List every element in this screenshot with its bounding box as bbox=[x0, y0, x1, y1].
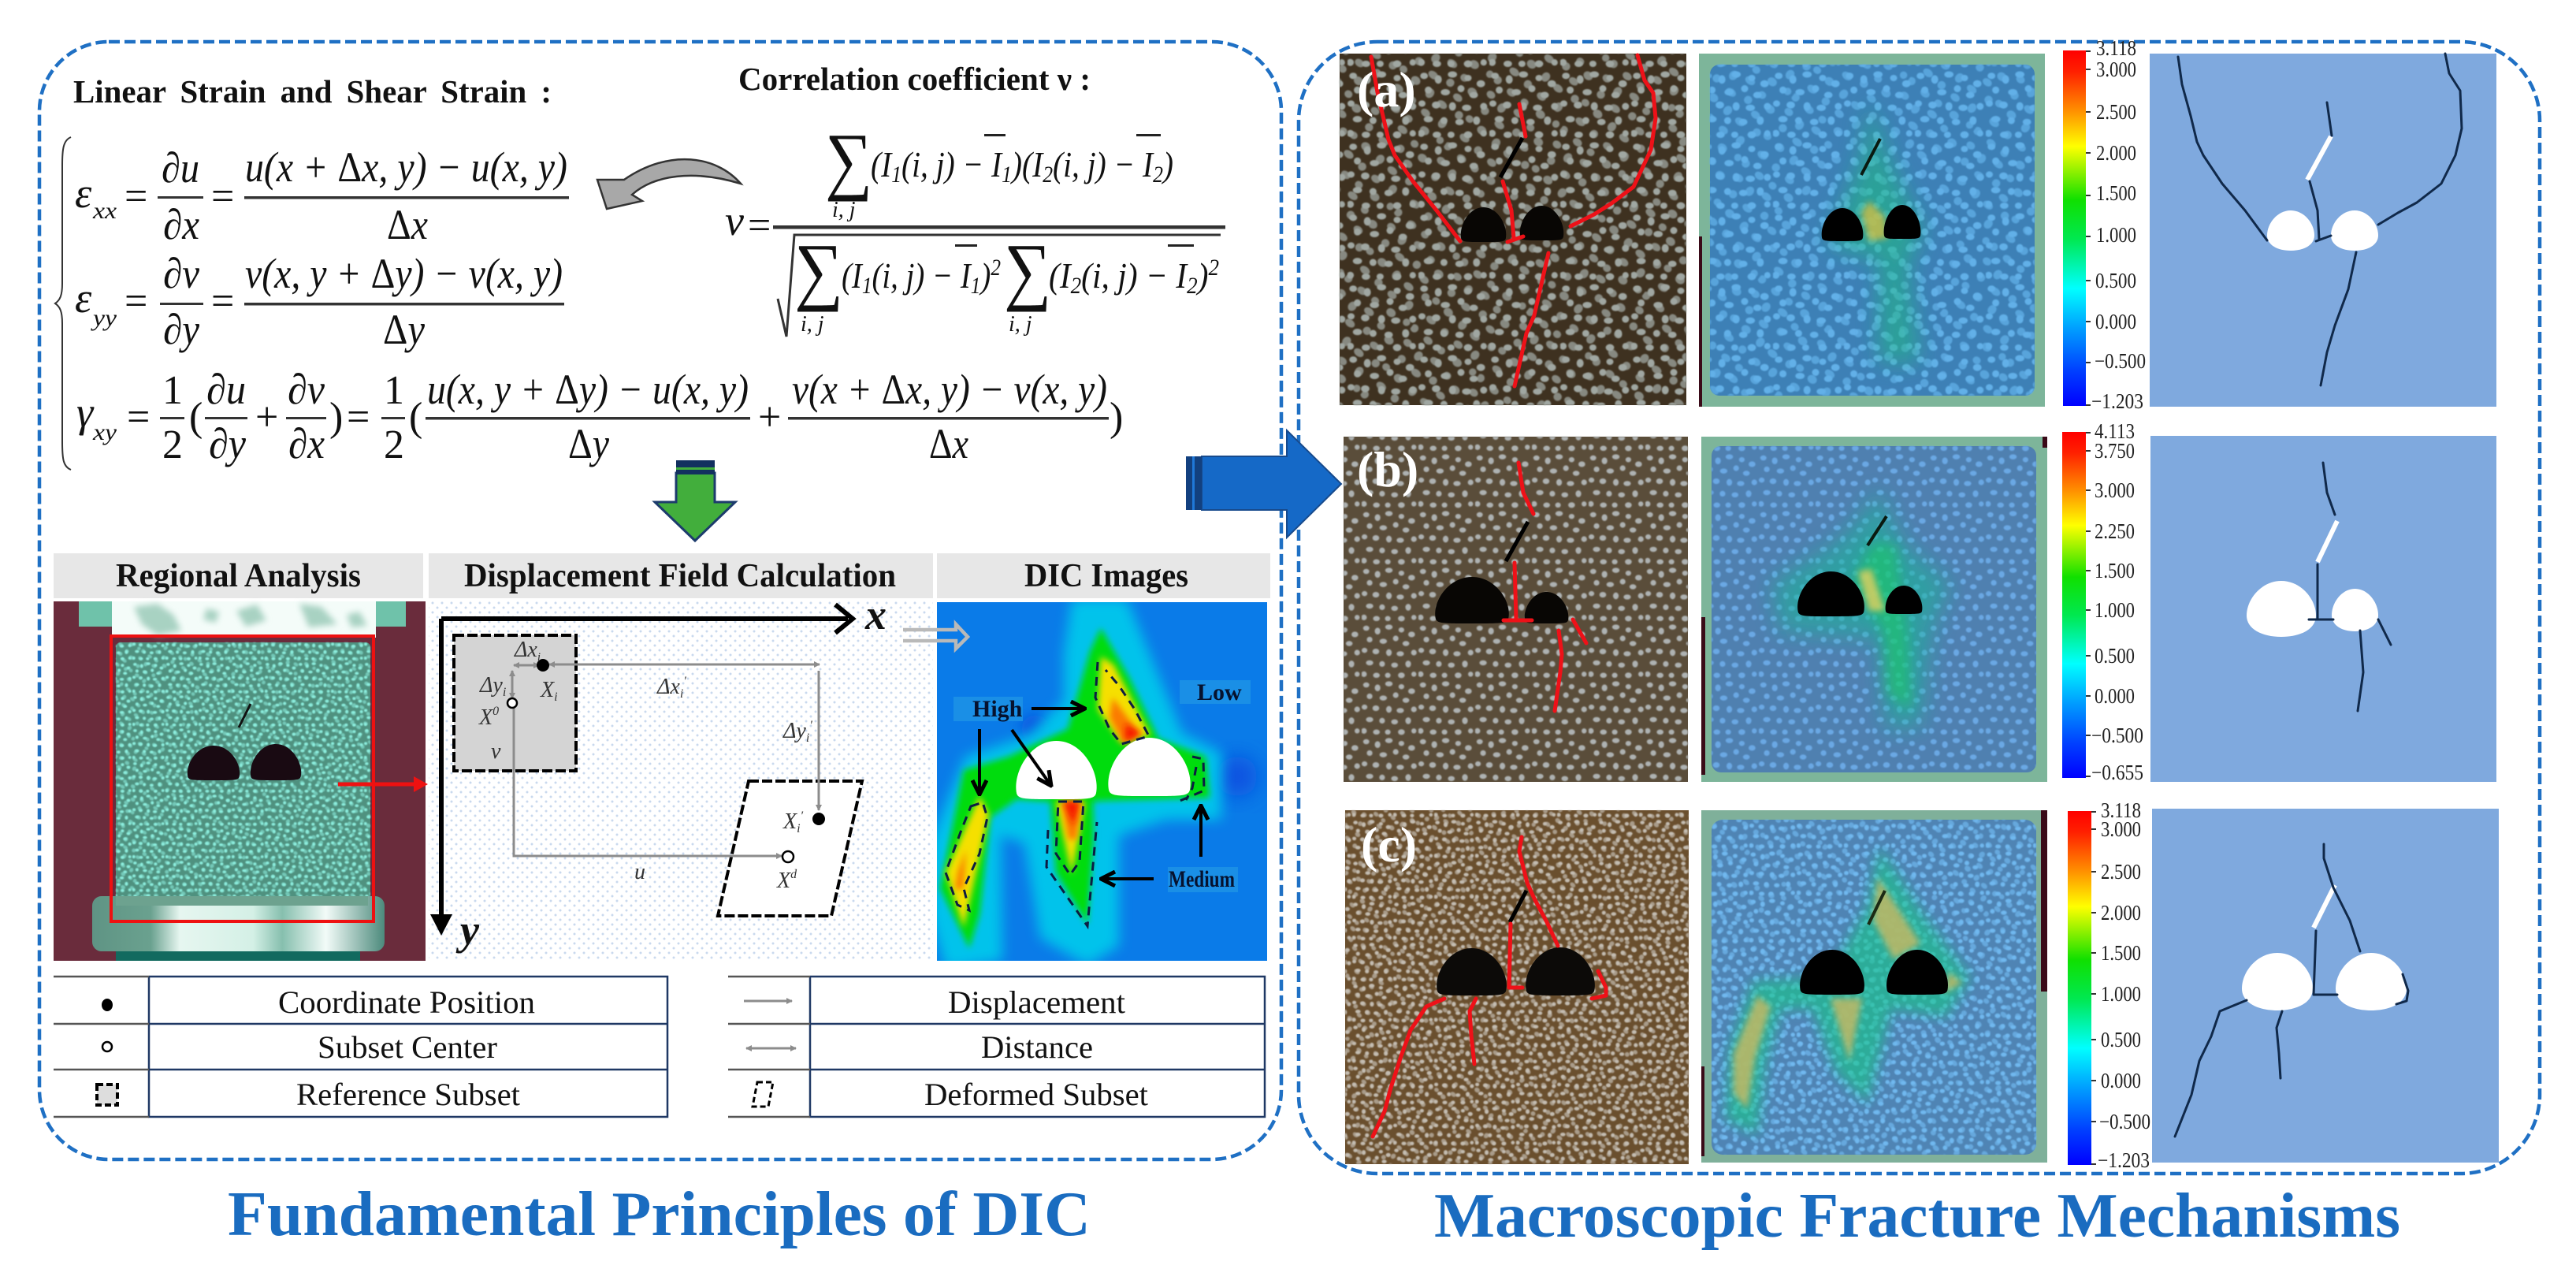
row b: colour bar bbox=[2062, 419, 2143, 784]
equations: strain formulas: Δx bbox=[929, 420, 968, 467]
row a: crack schematic bbox=[2150, 54, 2496, 407]
label: (b): (b) bbox=[1357, 441, 1418, 497]
equation: correlation coefficient: )(I bbox=[1009, 144, 1044, 184]
diagram: displacement field: ′ bbox=[683, 675, 686, 688]
diagram: displacement field: Δy bbox=[783, 719, 806, 743]
equation: correlation coefficient: 1 bbox=[1002, 162, 1012, 188]
diagram: displacement field: X bbox=[783, 809, 797, 834]
equations: strain formulas: = bbox=[125, 174, 147, 219]
row c: colour bar: 0.000 bbox=[2101, 1069, 2141, 1092]
equations: strain formulas: Δy bbox=[568, 420, 609, 467]
image: DIC strain field with high, medium and low labels bbox=[930, 599, 1267, 969]
row b: DIC overlay bbox=[1701, 437, 2047, 782]
legend table: symbols left: Subset Center bbox=[318, 1029, 497, 1065]
equations: strain formulas: ( bbox=[409, 395, 422, 440]
diagram: displacement field: i bbox=[554, 690, 558, 704]
label: Low bbox=[1180, 679, 1251, 705]
diagram: displacement field: X bbox=[541, 678, 554, 702]
row a: colour bar: −0.500 bbox=[2095, 349, 2146, 373]
equations: strain formulas: xx bbox=[92, 198, 117, 224]
equation: correlation coefficient: 2 bbox=[1153, 162, 1163, 188]
equation: correlation coefficient: (i, j) − I bbox=[1081, 255, 1189, 296]
row b: crack schematic bbox=[2150, 436, 2496, 782]
diagram: displacement field: Δx bbox=[515, 638, 537, 662]
panel: fundamental principles of DIC bbox=[39, 42, 1281, 1159]
label: (a): (a) bbox=[1357, 61, 1416, 117]
row c: colour bar: 0.500 bbox=[2101, 1028, 2141, 1051]
row c: colour bar: −0.500 bbox=[2099, 1110, 2150, 1133]
equation: correlation coefficient: i, j bbox=[832, 198, 856, 222]
diagram: displacement field bbox=[429, 591, 933, 961]
icon: open circle bbox=[102, 1042, 112, 1051]
equations: strain formulas: = bbox=[347, 395, 370, 440]
diagram: displacement field: i bbox=[503, 686, 506, 699]
legend table: symbols left: Coordinate Position bbox=[278, 984, 535, 1020]
row c: colour bar: −1.203 bbox=[2098, 1148, 2150, 1172]
icon: distance arrow bbox=[746, 1047, 796, 1050]
equations: strain formulas: ∂u bbox=[162, 144, 199, 192]
title: fundamental principles of DIC: Fundamental Principles of DIC bbox=[228, 1180, 1091, 1249]
row b: colour bar: 4.113 bbox=[2095, 419, 2135, 443]
equations: strain formulas: + bbox=[758, 395, 781, 440]
equation: correlation coefficient: 2 bbox=[1208, 255, 1219, 281]
row a: colour bar bbox=[2063, 36, 2146, 413]
legend table: symbols right: Deformed Subset bbox=[924, 1077, 1148, 1112]
row c: colour bar bbox=[2068, 798, 2150, 1172]
row c: colour bar: 2.000 bbox=[2101, 901, 2141, 925]
equations: strain formulas: ∂x bbox=[288, 420, 325, 467]
diagram: displacement field: Δy bbox=[480, 673, 503, 698]
equations: strain formulas: Δx bbox=[387, 201, 428, 248]
diagram: displacement field: d bbox=[790, 868, 797, 881]
equations: strain formulas: ( bbox=[189, 395, 203, 440]
diagram: displacement field: X bbox=[479, 705, 493, 730]
diagram: displacement field: v bbox=[491, 739, 501, 764]
equations: strain formulas: ∂y bbox=[209, 420, 246, 467]
arrow: large blue arrow between panels bbox=[1186, 430, 1341, 538]
diagram: displacement field: ′ bbox=[809, 719, 812, 732]
equation: correlation coefficient: (i, j) − I bbox=[872, 255, 972, 296]
row a: photo with cracks bbox=[1340, 54, 1686, 405]
diagram: displacement field: 0 bbox=[493, 705, 499, 718]
icon: displacement arrow bbox=[744, 999, 792, 1003]
row c: colour bar: 3.118 bbox=[2101, 798, 2141, 822]
equation: correlation coefficient: 2 bbox=[1043, 162, 1053, 188]
legend table: symbols right: Displacement bbox=[948, 984, 1125, 1020]
equations: strain formulas: xy bbox=[92, 419, 117, 445]
equation: correlation coefficient: ∑ bbox=[1004, 228, 1051, 312]
row b: colour bar: 0.500 bbox=[2095, 644, 2135, 668]
row a: colour bar: 3.118 bbox=[2096, 36, 2136, 60]
equations: strain formulas: 1 bbox=[162, 368, 183, 413]
legend table: symbols left: Reference Subset bbox=[296, 1077, 520, 1112]
arrow: red arrow from specimen to field bbox=[338, 776, 428, 792]
equations: strain formulas: ) bbox=[1110, 395, 1123, 440]
equation: correlation coefficient: 2 bbox=[1187, 273, 1198, 299]
section header: displacement field calculation: Displacement Field Calculation bbox=[464, 558, 896, 594]
row c: colour bar: 1.500 bbox=[2101, 941, 2141, 965]
label: High: High bbox=[972, 696, 1023, 722]
equation: correlation coefficient: ∑ bbox=[825, 117, 872, 202]
diagram: displacement field: i bbox=[806, 731, 809, 745]
diagram: displacement field: i bbox=[797, 822, 801, 835]
equation: correlation coefficient: i, j bbox=[801, 312, 824, 337]
equation: correlation coefficient: (I bbox=[871, 144, 895, 184]
row a: colour bar: 0.000 bbox=[2095, 310, 2136, 333]
diagram: displacement field: ′ bbox=[801, 809, 804, 823]
diagram: displacement field: Δx bbox=[657, 675, 680, 699]
equations: strain formulas: yy bbox=[91, 305, 117, 331]
row b: colour bar: 1.000 bbox=[2095, 598, 2135, 622]
equation: correlation coefficient: ∑ bbox=[794, 228, 843, 312]
equations: strain formulas: + bbox=[255, 395, 278, 440]
heading: correlation coefficient: Correlation coefficient ν : bbox=[738, 61, 1091, 97]
section header: DIC images: DIC Images bbox=[1024, 558, 1188, 594]
legend table: symbols left bbox=[54, 977, 667, 1117]
row a: colour bar: 2.000 bbox=[2096, 141, 2136, 165]
equation: correlation coefficient: ) bbox=[979, 255, 991, 296]
diagram: displacement field: i bbox=[680, 687, 683, 701]
equations: strain formulas: v(x, y + Δy) − v(x, y) bbox=[245, 250, 563, 297]
row a: colour bar: −1.203 bbox=[2091, 389, 2143, 413]
row c: colour bar: 1.000 bbox=[2101, 982, 2141, 1006]
icon: filled dot bbox=[102, 999, 113, 1011]
heading: linear strain and shear strain: Linear Strain and Shear Strain : bbox=[73, 73, 552, 110]
row a: colour bar: 1.000 bbox=[2096, 223, 2136, 247]
section header: DIC images bbox=[937, 553, 1270, 598]
title: macroscopic fracture mechanisms: Macroscopic Fracture Mechanisms bbox=[1434, 1181, 2400, 1251]
label: Low: Low bbox=[1197, 679, 1242, 705]
equations: strain formulas: γ bbox=[76, 389, 95, 436]
row c: photo with cracks bbox=[1345, 810, 1689, 1164]
row b: photo with cracks bbox=[1344, 437, 1688, 782]
equations: strain formulas: ) bbox=[329, 395, 343, 440]
equations: strain formulas: ∂v bbox=[163, 250, 199, 297]
row b: colour bar: −0.655 bbox=[2091, 761, 2143, 784]
arrow: green down arrow bbox=[655, 460, 735, 541]
equations: strain formulas: = bbox=[125, 279, 147, 324]
row a: DIC overlay bbox=[1699, 54, 2045, 407]
row c: colour bar: 3.000 bbox=[2101, 817, 2141, 841]
equation: correlation coefficient: ) bbox=[1161, 144, 1173, 184]
row a: colour bar: 2.500 bbox=[2096, 100, 2136, 124]
image: specimen for regional analysis bbox=[54, 601, 426, 961]
equation: correlation coefficient: = bbox=[748, 203, 771, 248]
equations: strain formulas: ∂v bbox=[288, 366, 325, 413]
equation: correlation coefficient: (i, j) − I bbox=[901, 144, 1003, 184]
arrow: hollow grey arrow bbox=[903, 624, 968, 649]
equations: strain formulas: = bbox=[211, 279, 234, 324]
row b: colour bar: 0.000 bbox=[2095, 684, 2135, 708]
label: Medium: Medium bbox=[1169, 866, 1235, 892]
equation: correlation coefficient: i, j bbox=[1009, 312, 1032, 337]
equation: correlation coefficient: 2 bbox=[1071, 273, 1081, 299]
diagram: displacement field: X bbox=[777, 869, 790, 893]
row c: DIC overlay bbox=[1701, 810, 2047, 1163]
equations: strain formulas: ∂u bbox=[206, 366, 246, 413]
row b: colour bar: −0.500 bbox=[2091, 724, 2143, 747]
diagram: displacement field: y bbox=[455, 906, 480, 954]
legend table: symbols right: Distance bbox=[981, 1029, 1093, 1065]
equations: strain formulas: u(x, y + Δy) − u(x, y) bbox=[427, 366, 749, 413]
row b: colour bar: 3.750 bbox=[2095, 439, 2135, 463]
equations: strain formulas: 2 bbox=[384, 422, 404, 467]
equation: correlation coefficient: 1 bbox=[862, 273, 872, 299]
row a: colour bar: 3.000 bbox=[2096, 58, 2136, 81]
equations: strain formulas: ε bbox=[75, 274, 92, 322]
diagram: displacement field: u bbox=[634, 860, 645, 884]
equation: correlation coefficient: ν bbox=[725, 197, 744, 244]
equations: strain formulas: 1 bbox=[384, 368, 404, 413]
equation: correlation coefficient: ) bbox=[1195, 255, 1208, 296]
equation: correlation coefficient: 1 bbox=[971, 273, 980, 299]
equations: strain formulas: = bbox=[211, 174, 234, 219]
panel: macroscopic fracture mechanisms bbox=[1299, 36, 2540, 1174]
equation: correlation coefficient: (I bbox=[842, 255, 866, 296]
equations: strain formulas: = bbox=[127, 395, 150, 440]
legend table: symbols right bbox=[728, 977, 1265, 1117]
diagram: displacement field: x bbox=[864, 591, 887, 638]
arrow: curved grey arrow bbox=[597, 159, 741, 209]
equation: correlation coefficient: 1 bbox=[891, 162, 901, 188]
equation: correlation coefficient: (i, j) − I bbox=[1053, 144, 1154, 184]
equations: strain formulas: Δy bbox=[383, 306, 425, 353]
row c: crack schematic bbox=[2152, 809, 2499, 1163]
icon: dashed reference box bbox=[97, 1085, 117, 1105]
diagram: displacement field: i bbox=[537, 651, 541, 664]
equations: strain formulas: 2 bbox=[162, 422, 183, 467]
equations: strain formulas: ∂x bbox=[163, 201, 199, 248]
row b: colour bar: 3.000 bbox=[2095, 478, 2135, 502]
section header: regional analysis bbox=[54, 553, 423, 598]
equations: strain formulas: u(x + Δx, y) − u(x, y) bbox=[245, 143, 567, 191]
equation: correlation coefficient: 2 bbox=[991, 255, 1001, 281]
equations: strain formulas: v(x + Δx, y) − v(x, y) bbox=[792, 366, 1107, 413]
icon: dashed deformed box bbox=[753, 1082, 773, 1107]
row c: colour bar: 2.500 bbox=[2101, 860, 2141, 884]
equations: strain formulas bbox=[55, 137, 1123, 470]
row a: colour bar: 0.500 bbox=[2095, 269, 2136, 292]
row a: colour bar: 1.500 bbox=[2096, 181, 2136, 205]
section header: regional analysis: Regional Analysis bbox=[116, 558, 361, 594]
equations: strain formulas: ε bbox=[75, 169, 92, 217]
label: (c): (c) bbox=[1361, 817, 1417, 873]
equation: correlation coefficient bbox=[725, 117, 1225, 337]
equation: correlation coefficient: (I bbox=[1049, 255, 1073, 296]
equations: strain formulas: ∂y bbox=[163, 306, 199, 353]
row b: colour bar: 2.250 bbox=[2095, 519, 2135, 543]
row b: colour bar: 1.500 bbox=[2095, 559, 2135, 582]
